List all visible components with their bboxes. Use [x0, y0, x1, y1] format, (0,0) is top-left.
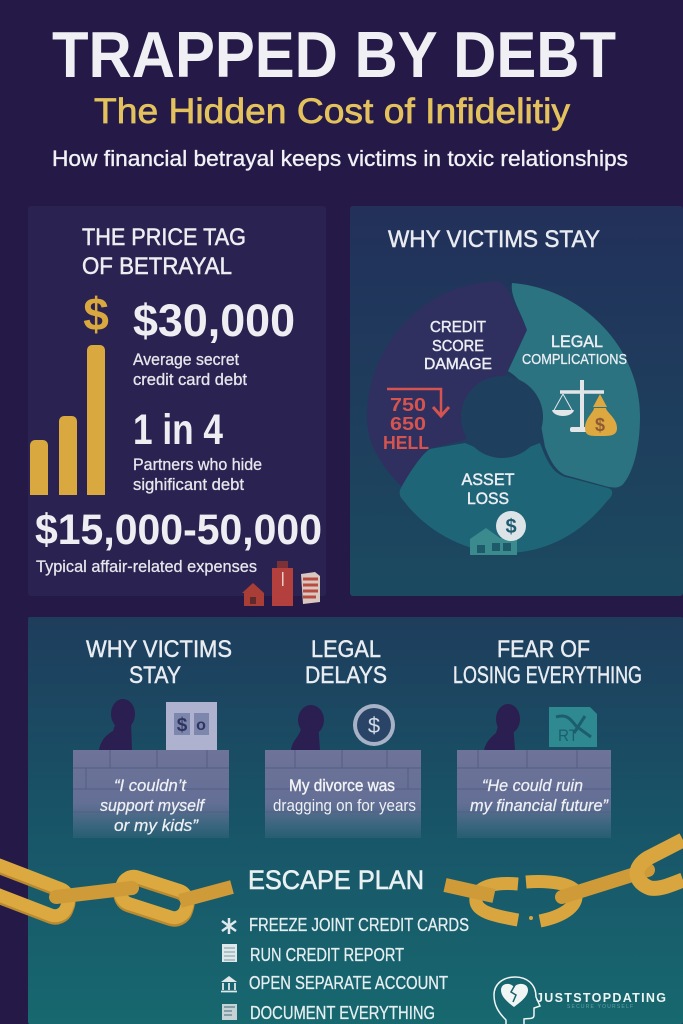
segment: asset loss: LOSS: [467, 489, 509, 508]
heading: why victims stay: WHY VICTIMS STAY: [388, 226, 600, 253]
stat: $30,000: credit card debt: [133, 370, 247, 389]
item: document: DOCUMENT EVERYTHING: [250, 1003, 435, 1023]
segment: asset loss: [400, 443, 612, 553]
icon: scales and money bag: [552, 380, 617, 436]
stat: $30,000: Average secret: [133, 350, 239, 369]
stat: $15,000-50,000: $15,000-50,000: [35, 506, 322, 554]
heading: price tag: THE PRICE TAG: [82, 224, 246, 251]
stat: 1 in 4: [133, 406, 262, 494]
icon: falling credit card: [549, 707, 597, 747]
brick wall with quote: my financial future”: [470, 796, 609, 815]
heading: WHY VICTIMS: [86, 636, 232, 663]
stat: $30,000: [133, 295, 295, 389]
panel: why victims stay quotes and escape plan: [28, 617, 683, 1024]
title block: [52, 18, 628, 171]
panel: why victims stay donut: [350, 206, 683, 596]
heading: [453, 636, 642, 689]
logo: juststopdating: [494, 977, 666, 1024]
heading: price tag: [82, 224, 246, 280]
segment: credit score damage: DAMAGE: [424, 356, 492, 373]
column: legal delays: [265, 636, 421, 838]
icon: scales and money bag: $: [595, 415, 605, 435]
silhouette: [484, 704, 520, 750]
icon: gold dollar sign: $: [83, 288, 109, 340]
heading: LEGAL: [311, 636, 381, 663]
heading: escape plan: ESCAPE PLAN: [248, 865, 424, 895]
stat: 1 in 4: sighificant debt: [133, 475, 244, 494]
segment: credit score damage: SCORE: [432, 338, 484, 355]
heading: [305, 636, 387, 689]
checklist: escape plan: [221, 915, 469, 1023]
segment: asset loss: ASSET: [462, 470, 514, 489]
segment: credit score damage: CREDIT: [430, 319, 486, 336]
subtitle: The Hidden Cost of Infidelitiy: [94, 92, 571, 131]
brick wall with quote: “I couldn’t: [114, 776, 187, 795]
brick wall with quote: or my kids”: [114, 816, 199, 835]
brick wall with quote: [265, 750, 421, 838]
column: fear of losing everything: [453, 636, 642, 838]
segment: legal complications: COMPLICATIONS: [522, 351, 627, 368]
credit score drop: HELL: [383, 433, 429, 453]
brick wall with quote: “He could ruin: [482, 776, 583, 795]
icon: falling credit card: RT: [558, 726, 578, 745]
item: open account: OPEN SEPARATE ACCOUNT: [249, 973, 448, 993]
item: credit report: RUN CREDIT REPORT: [250, 945, 404, 965]
icon: coin clock: $: [368, 713, 380, 738]
brick wall with quote: My divorce was: [289, 776, 395, 795]
icon: intact chain left: [0, 861, 232, 923]
title: TRAPPED BY DEBT: [52, 18, 616, 91]
tagline: How financial betrayal keeps victims in toxic relationships: [52, 146, 628, 171]
stat: $15,000-50,000: Typical affair-related expenses: [36, 558, 257, 576]
segment: legal complications: [508, 283, 640, 488]
item: credit report: [222, 944, 404, 965]
icon: document: [301, 572, 320, 604]
column: why victims stay: [73, 636, 232, 838]
credit score drop: [383, 389, 449, 453]
icon: broken chain right: [445, 840, 683, 921]
silhouette: [291, 705, 324, 750]
heading: FEAR OF: [497, 636, 590, 663]
credit score drop: 750: [390, 395, 426, 415]
sign with $0: [166, 702, 217, 750]
donut hole: [461, 376, 543, 458]
heading: price tag: OF BETRAYAL: [82, 253, 232, 280]
stat: 1 in 4: Partners who hide: [133, 455, 262, 474]
panel: price tag of betrayal: [28, 206, 326, 606]
bar chart: [30, 345, 105, 495]
heading: DELAYS: [305, 662, 387, 689]
sign with $0: o: [196, 717, 206, 734]
heading: STAY: [129, 662, 181, 689]
brick wall with quote: [73, 750, 229, 838]
logo: juststopdating: JUSTSTOPDATING: [536, 991, 666, 1005]
brick wall with quote: support myself: [100, 796, 206, 815]
stat: $15,000-50,000: [35, 506, 322, 576]
credit score drop: 650: [390, 414, 426, 434]
icon: house with coin: $: [505, 516, 517, 538]
brick wall with quote: [457, 750, 611, 838]
icon: coin clock: [353, 704, 395, 746]
segment: credit score damage: [367, 281, 527, 487]
silhouette: [99, 699, 135, 750]
segment: legal complications: LEGAL: [551, 332, 603, 351]
icon: house with coin: [470, 511, 526, 555]
icon: red suitcase: [272, 561, 293, 606]
item: freeze: FREEZE JOINT CREDIT CARDS: [249, 915, 469, 935]
sign with $0: $: [177, 715, 188, 736]
logo: juststopdating: SECURE YOURSELF: [567, 1004, 633, 1010]
heading: [86, 636, 232, 689]
stat: 1 in 4: 1 in 4: [133, 406, 223, 454]
brick wall with quote: dragging on for years: [273, 796, 416, 815]
stat: $30,000: $30,000: [133, 295, 295, 346]
icon: small house: [242, 583, 264, 606]
